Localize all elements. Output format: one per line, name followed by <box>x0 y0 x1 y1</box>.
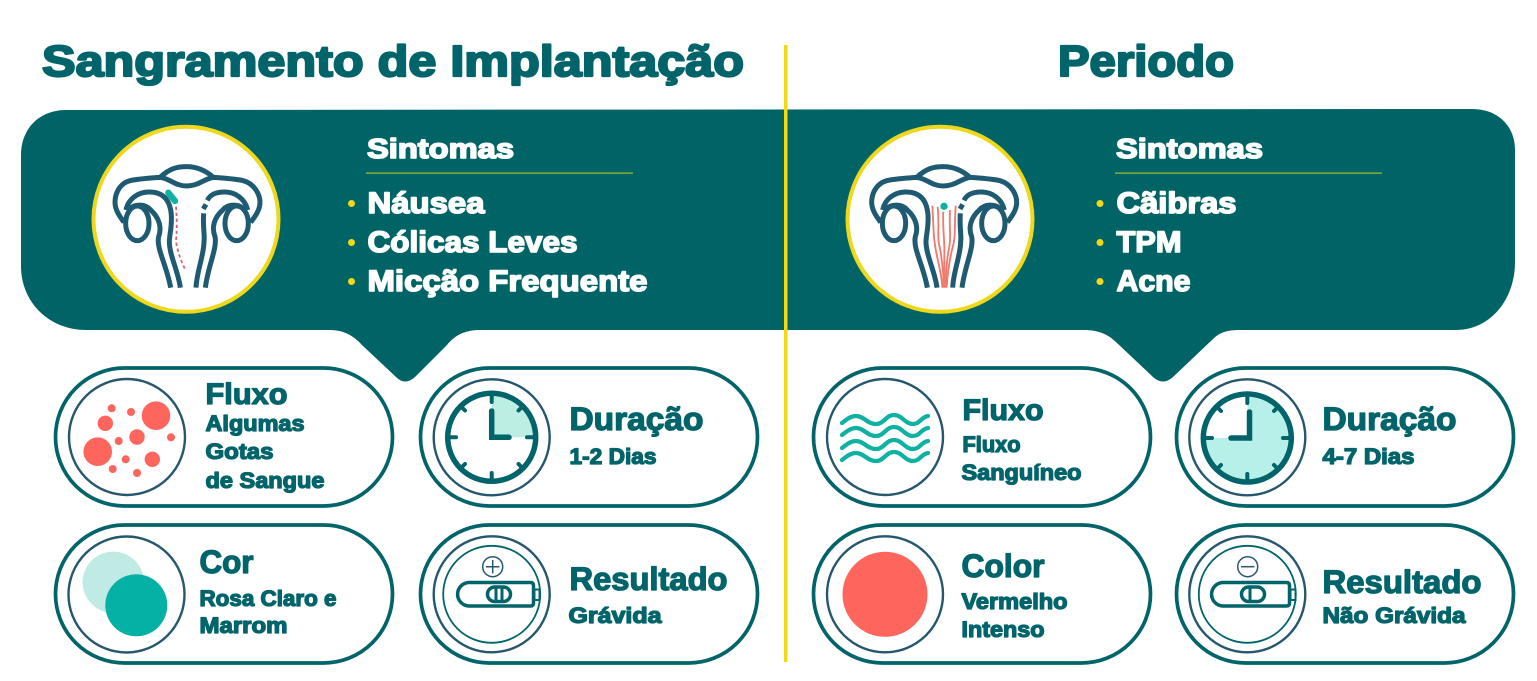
card: result, period: Resultado <box>1322 564 1482 600</box>
symptoms list: period <box>1096 133 1382 298</box>
card: duration, implantation <box>420 368 758 506</box>
icon: positive pregnancy test <box>443 546 540 643</box>
card: colour, implantation: Rosa Claro e <box>200 586 336 611</box>
card: result, implantation <box>420 525 758 663</box>
icon: clock 1-2 days <box>448 393 536 481</box>
card: colour, period: Intenso <box>962 617 1044 642</box>
card: duration, implantation: 1-2 Dias <box>570 444 656 469</box>
symptoms list: implantation: Micção Frequente <box>368 265 648 298</box>
icon: red swatch <box>842 552 928 637</box>
card: duration, period <box>1176 368 1514 506</box>
symptoms list: implantation: Náusea <box>368 187 485 220</box>
card: flow, implantation: de Sangue <box>206 468 324 493</box>
centre divider <box>784 45 788 662</box>
symptoms list: implantation: Cólicas Leves <box>368 226 578 259</box>
icon: negative pregnancy test <box>1199 546 1296 643</box>
card: flow, implantation: Fluxo <box>206 378 288 411</box>
card: duration, period: 4-7 Dias <box>1322 444 1414 469</box>
card: colour, period <box>814 525 1150 663</box>
icon: blood drops <box>83 401 175 477</box>
symptoms list: implantation: Sintomas <box>367 133 514 164</box>
symptoms list: period: TPM <box>1116 226 1182 259</box>
card: flow, implantation: Algumas <box>206 411 304 436</box>
card: colour, period: Color <box>962 548 1044 584</box>
title: period: Periodo <box>1058 37 1234 86</box>
card: result, period: Não Grávida <box>1322 603 1466 628</box>
icon: uterus with menstruation <box>848 127 1032 312</box>
symptoms list: period: Sintomas <box>1116 133 1263 164</box>
title: implantation bleeding: Sangramento de Implantação <box>42 37 744 86</box>
card: colour, implantation <box>56 525 392 663</box>
card: duration, implantation: Duração <box>570 401 704 437</box>
icon: uterus with implantation <box>94 127 278 312</box>
icon: clock 4-7 days <box>1203 394 1291 482</box>
icon: waves <box>842 415 928 461</box>
card: flow, period: Fluxo <box>962 432 1020 457</box>
icon: colour swatches <box>83 552 167 636</box>
symptoms list: period: Acne <box>1116 265 1190 298</box>
banner: symptoms <box>21 109 1515 382</box>
symptoms list: period: Cãibras <box>1116 187 1236 220</box>
card: flow, period <box>814 368 1150 506</box>
card: colour, implantation: Marrom <box>200 613 288 638</box>
card: result, implantation: Grávida <box>568 603 662 628</box>
symptoms list: implantation <box>348 133 648 298</box>
card: flow, period: Sanguíneo <box>962 460 1082 485</box>
card: flow, implantation: Gotas <box>206 439 274 464</box>
card: flow, implantation <box>56 368 392 506</box>
card: flow, period: Fluxo <box>962 394 1044 427</box>
card: result, implantation: Resultado <box>570 561 728 597</box>
card: colour, period: Vermelho <box>962 589 1068 614</box>
card: duration, period: Duração <box>1322 401 1456 437</box>
card: result, period <box>1176 525 1514 663</box>
card: colour, implantation: Cor <box>200 544 254 580</box>
